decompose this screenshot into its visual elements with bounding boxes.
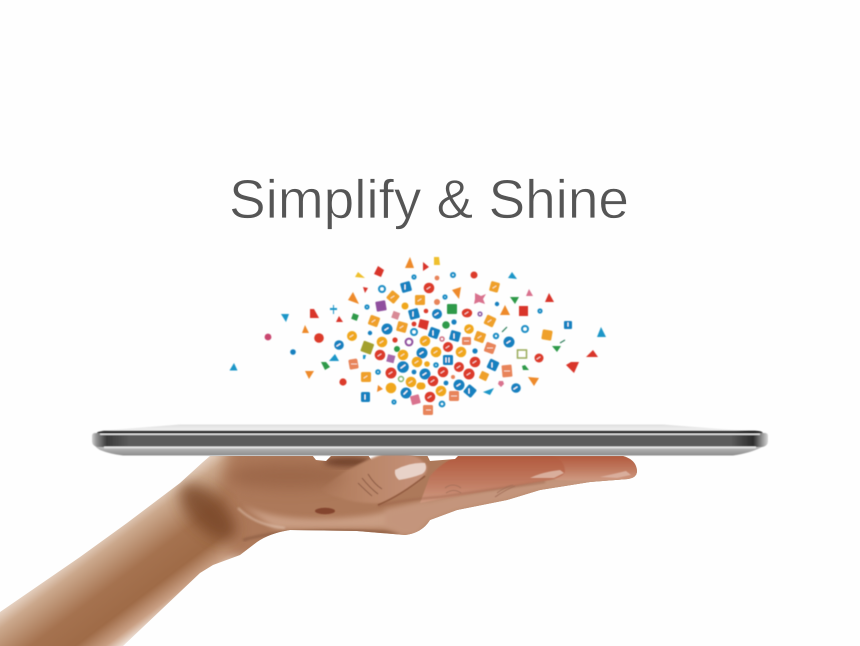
wrist shadow <box>171 475 245 549</box>
top glass surface <box>97 424 760 432</box>
thumb <box>320 453 427 503</box>
hand silhouette with blended shading <box>0 456 637 646</box>
yellow circle icons <box>347 302 474 396</box>
red squares and triangles <box>310 262 598 373</box>
shadow under index finger <box>378 482 545 506</box>
fingernails <box>530 470 631 478</box>
middle finger <box>554 456 637 480</box>
arm and hand <box>0 454 637 646</box>
teal and small blue marks <box>230 272 606 395</box>
index finger <box>420 456 565 503</box>
black screen edge <box>97 431 763 433</box>
orange outlined and pale orange icons <box>348 276 513 415</box>
palm lower rim <box>243 531 400 540</box>
palm crease spot <box>315 508 335 514</box>
lower silver chassis <box>92 440 768 456</box>
tablet, seen edge-on <box>92 424 768 456</box>
blue circle icons <box>290 302 521 398</box>
knuckle creases <box>445 485 515 497</box>
light highlight lines <box>100 434 760 435</box>
palm highlight <box>248 508 390 531</box>
thumb lower shadow <box>378 476 425 505</box>
purple and pink icons <box>265 289 533 405</box>
blue square icons <box>361 281 572 402</box>
forearm base <box>0 456 266 646</box>
wrist crease <box>238 508 285 528</box>
white gaps between thumb and hand <box>312 456 458 461</box>
infographic canvas <box>0 178 768 646</box>
thumb creases <box>358 474 382 496</box>
thumbnail <box>395 463 426 480</box>
title: Simplify & Shine <box>229 168 629 230</box>
icon cloud: colourful app icons <box>230 257 606 415</box>
palm base colour <box>220 456 637 560</box>
blue ring icons <box>365 273 542 406</box>
red circle icons <box>314 272 544 402</box>
green icons <box>321 297 565 382</box>
dark side band <box>92 433 768 447</box>
back-of-hand shadow <box>228 463 352 489</box>
lower fingers <box>385 472 640 536</box>
orange triangles <box>302 257 539 392</box>
yellow triangles and marks <box>355 257 440 278</box>
orange square icons <box>361 281 553 382</box>
